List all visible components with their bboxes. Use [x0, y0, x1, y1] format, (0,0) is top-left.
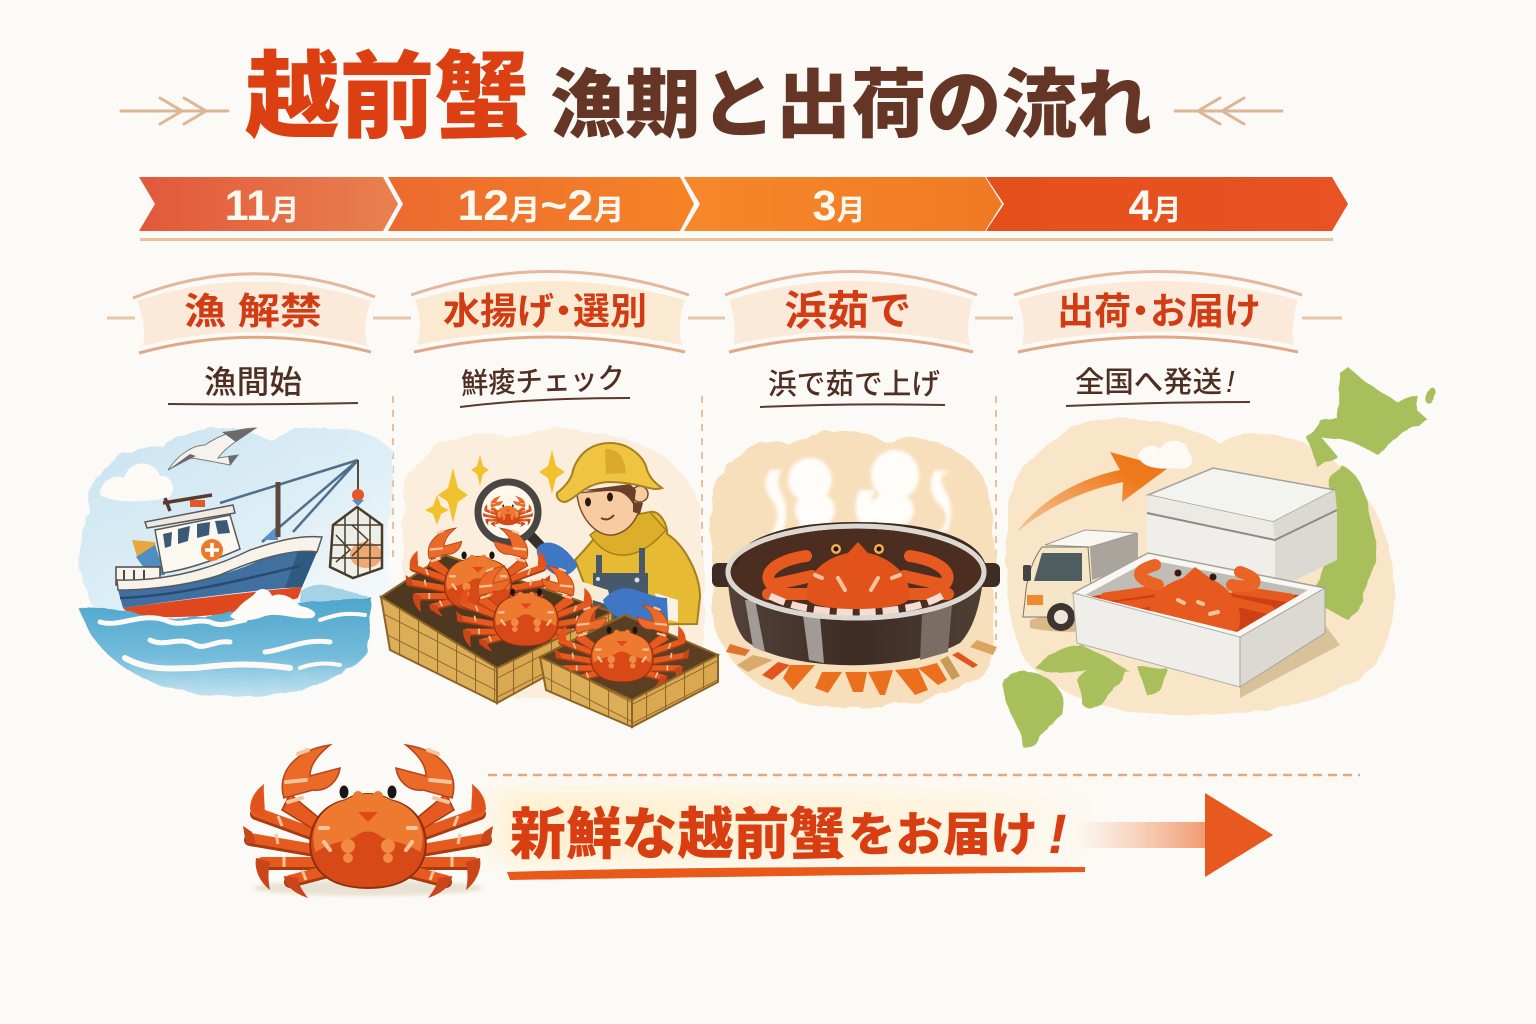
- illustration: fishing boat at sea: [80, 428, 392, 696]
- month arrow: 12月~2月: [388, 177, 694, 231]
- truck: [1023, 530, 1138, 632]
- title: [245, 45, 1152, 151]
- slogan: 新鮮な越前蟹: [510, 803, 845, 866]
- back glove: [537, 542, 578, 576]
- month arrow: 11月: 11月: [225, 182, 299, 230]
- step heading: 水揚げ・選別: 水揚げ・選別: [443, 291, 647, 332]
- crab cage: [330, 489, 382, 578]
- backdrop: [712, 431, 995, 708]
- delivery arrow: [1017, 452, 1168, 532]
- hoodie: [575, 512, 700, 625]
- cloud: [1138, 441, 1192, 469]
- head: [577, 487, 643, 535]
- subtitle: 漁間始: 漁間始: [204, 364, 302, 400]
- boat: [116, 495, 322, 617]
- subtitle: 全国へ発送!: 全国へ発送: [1075, 366, 1222, 399]
- step heading: 漁 解禁: 漁 解禁: [184, 291, 322, 332]
- step heading: 出荷・お届け: [1014, 272, 1302, 352]
- month arrow: 3月: [684, 177, 1002, 231]
- large basket: [381, 528, 612, 703]
- left title ornament arrow: [121, 98, 228, 124]
- crab in pot: [768, 542, 948, 609]
- month arrow: 4月: [986, 177, 1348, 231]
- beige backdrop: [1006, 418, 1394, 715]
- banner wash: [470, 790, 1110, 862]
- beige backdrop: [402, 428, 705, 700]
- illustration: worker inspecting crabs: [381, 428, 718, 727]
- slogan ending: をお届け: [848, 808, 1038, 861]
- steam: [765, 450, 951, 555]
- worker: [545, 443, 700, 625]
- bottom crab mascot: [243, 745, 493, 898]
- large arrow: [1075, 793, 1273, 877]
- fire: [726, 640, 997, 695]
- open foam box with crab: [1073, 553, 1340, 698]
- apron: [593, 573, 648, 620]
- title main: 漁期と出荷の流れ: 漁期と出荷の流れ: [550, 63, 1152, 147]
- bow foam: [230, 589, 315, 620]
- right title ornament arrow: [1175, 98, 1282, 124]
- sparkles: [425, 450, 565, 525]
- cloud: [100, 464, 173, 501]
- step heading: 浜茹で: [725, 272, 977, 352]
- front glove: [603, 588, 678, 622]
- map of Japan: [1002, 367, 1438, 749]
- title accent: 越前蟹: 越前蟹: [245, 45, 529, 151]
- subtitle: 浜で茹で上げ: 浜で茹で上げ: [768, 368, 940, 401]
- subtitle: 全国へ発送!: !: [1226, 364, 1235, 399]
- small basket: [540, 605, 718, 727]
- back wave: [300, 585, 368, 610]
- slogan exclamation: !: [1048, 802, 1067, 865]
- sea: [80, 598, 372, 696]
- month arrow: 12月~2月: 12月~2月: [458, 182, 624, 230]
- rain hat: [557, 443, 662, 502]
- foam: [770, 594, 945, 612]
- illustration: boiling pot: [712, 431, 1000, 708]
- month arrow: 11月: [139, 177, 398, 231]
- seagull: [168, 428, 256, 470]
- waves: [100, 614, 365, 669]
- pot: [712, 524, 1000, 665]
- sky wash: [80, 428, 392, 620]
- foam box with lid: [1147, 468, 1337, 600]
- timeline ribbon: [139, 177, 1348, 231]
- step heading: 出荷・お届け: 出荷・お届け: [1057, 291, 1261, 332]
- subtitle: 鮮痠チェック: 鮮痠チェック: [460, 362, 625, 401]
- step heading: 漁 解禁: [133, 274, 375, 353]
- brush underline: [507, 867, 1085, 880]
- illustration: Japan map backdrop and shipping: [1002, 367, 1438, 749]
- crab in box: [1105, 565, 1290, 631]
- bottom banner: [243, 745, 1360, 898]
- magnifying glass: [478, 482, 578, 576]
- subtitle: 全国へ発送!: [1066, 364, 1250, 406]
- paper liner: [545, 570, 612, 606]
- step heading: 水揚げ・選別: [411, 272, 689, 352]
- step heading: 浜茹で: 浜茹で: [784, 288, 912, 334]
- fishing gear rigging: [220, 460, 358, 542]
- month arrow: 4月: 4月: [1129, 182, 1181, 230]
- month arrow: 3月: 3月: [813, 182, 865, 230]
